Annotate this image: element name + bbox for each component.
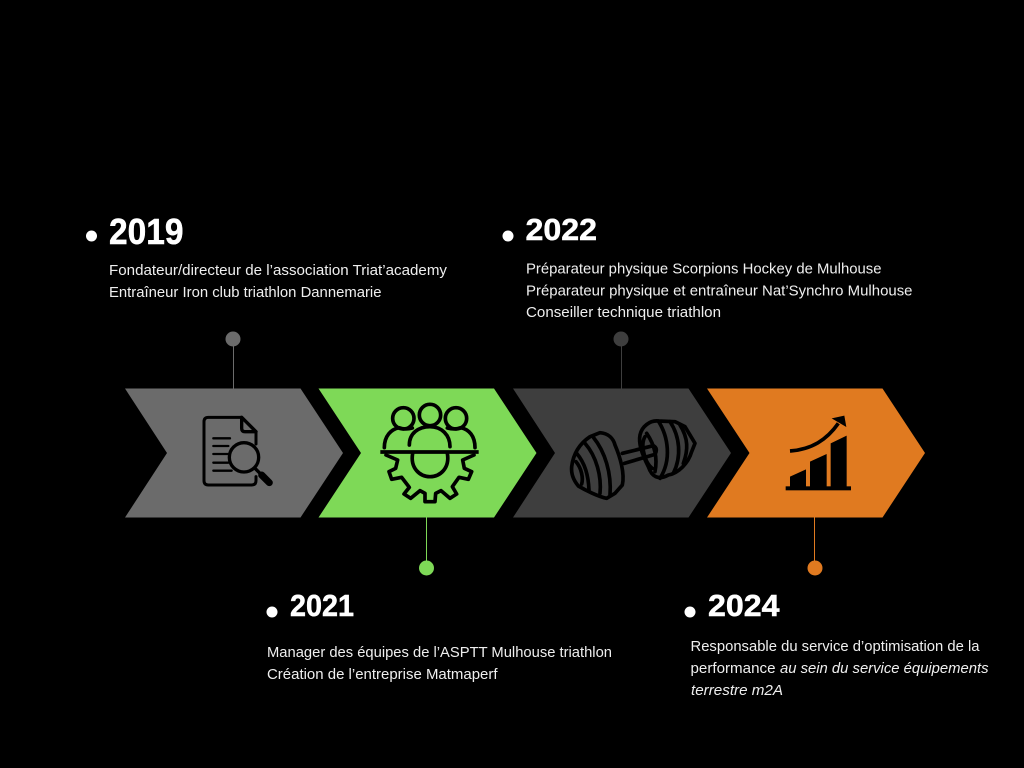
description: Responsable du service d’optimisation de la [690, 638, 980, 655]
icon: team and gear [380, 404, 479, 502]
block: 2019 [86, 211, 448, 301]
description: Préparateur physique Scorpions Hockey de Mulhouse [526, 260, 882, 278]
description: Manager des équipes de l’ASPTT Mulhouse triathlon [267, 644, 612, 661]
connector: 2022 [614, 332, 628, 389]
connector: 2021 [419, 517, 434, 576]
chevron: 2019 grey [125, 388, 343, 518]
chevron: 2024 orange [707, 388, 925, 518]
icon: rising bar chart [786, 416, 851, 490]
description: au sein du service équipements [780, 660, 989, 677]
description: Fondateur/directeur de l’association Triat’academy [109, 262, 448, 279]
description: Entraîneur Iron club triathlon Dannemarie [109, 284, 382, 301]
connector: 2024 [808, 517, 822, 576]
description: Conseiller technique triathlon [526, 304, 721, 321]
description: performance [690, 660, 776, 677]
icon: dumbbell [572, 421, 695, 498]
description: terrestre m2A [691, 682, 783, 699]
bullet [86, 230, 97, 242]
year: 2021 [290, 588, 354, 623]
year: 2022 [526, 212, 597, 247]
block: 2024 [684, 588, 989, 699]
block: 2021 [266, 588, 612, 683]
year: 2024 [708, 588, 780, 623]
bullet [502, 230, 514, 242]
chevron: 2021 green [318, 388, 536, 518]
icon: document with magnifier [204, 417, 269, 485]
bullet [684, 606, 696, 618]
chevron: 2022 dark grey [513, 388, 731, 518]
description: Création de l’entreprise Matmaperf [267, 666, 498, 683]
bullet [266, 606, 278, 618]
block: 2022 [502, 212, 912, 321]
year: 2019 [109, 211, 184, 252]
connector: 2019 [226, 332, 240, 389]
description: Préparateur physique et entraîneur Nat’Synchro Mulhouse [526, 282, 912, 300]
